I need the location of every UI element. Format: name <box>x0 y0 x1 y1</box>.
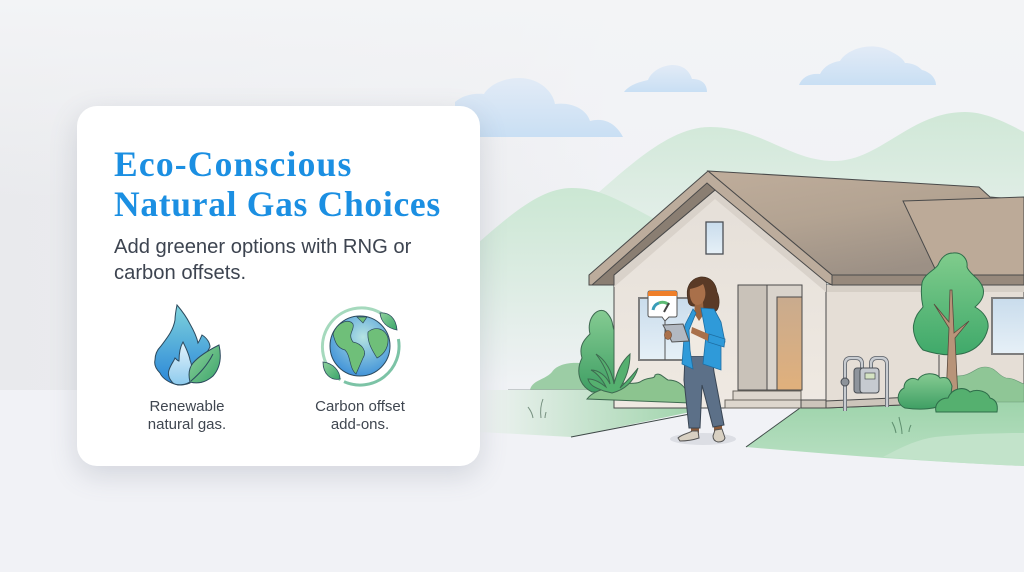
foundation <box>801 392 1024 408</box>
gable roof edge <box>589 171 832 285</box>
shoes <box>678 429 725 442</box>
tree <box>898 253 997 412</box>
gable wall <box>614 190 826 408</box>
label: renewable natural gas <box>148 398 226 433</box>
label: renewable natural gas: natural gas. <box>148 416 226 433</box>
house <box>589 171 1024 408</box>
background hills <box>470 112 1024 390</box>
right window <box>992 298 1024 354</box>
ground <box>480 390 1024 466</box>
shrubs left <box>579 310 690 403</box>
shirt <box>688 313 706 356</box>
gas meter <box>841 358 887 411</box>
steps <box>725 391 801 408</box>
wing roof <box>903 197 1024 275</box>
ankles <box>691 424 722 433</box>
front window <box>639 298 699 360</box>
label: carbon offset add-ons: Carbon offset <box>315 398 405 415</box>
icons <box>154 304 401 387</box>
label: carbon offset add-ons: add-ons. <box>331 416 389 433</box>
main roof <box>708 171 1024 275</box>
card panel <box>77 106 480 466</box>
jacket <box>682 308 725 370</box>
label: carbon offset add-ons <box>315 398 405 433</box>
title: Eco-Conscious <box>114 144 352 184</box>
shadow <box>670 433 736 445</box>
back bush right <box>957 367 1024 402</box>
title: Natural Gas Choices <box>114 184 441 224</box>
title <box>114 144 441 224</box>
icon: flame with leaf <box>155 305 220 385</box>
bushes right <box>898 374 952 409</box>
hand <box>664 330 672 340</box>
right wall <box>826 285 1024 408</box>
porch <box>738 285 802 390</box>
label: renewable natural gas: Renewable <box>149 398 225 415</box>
pants <box>684 356 724 428</box>
hair <box>687 277 719 312</box>
neck and face <box>694 302 704 322</box>
subtitle: Add greener options with RNG or <box>114 236 411 258</box>
tablet <box>663 324 689 342</box>
subtitle: carbon offsets. <box>114 262 246 284</box>
icon: globe with leaves <box>322 308 399 385</box>
woman <box>663 277 736 445</box>
subtitle <box>114 236 411 284</box>
attic window <box>706 222 723 254</box>
arm <box>691 327 711 342</box>
gauge speech bubble <box>648 291 677 321</box>
background bushes <box>508 363 590 390</box>
clouds <box>455 46 936 137</box>
